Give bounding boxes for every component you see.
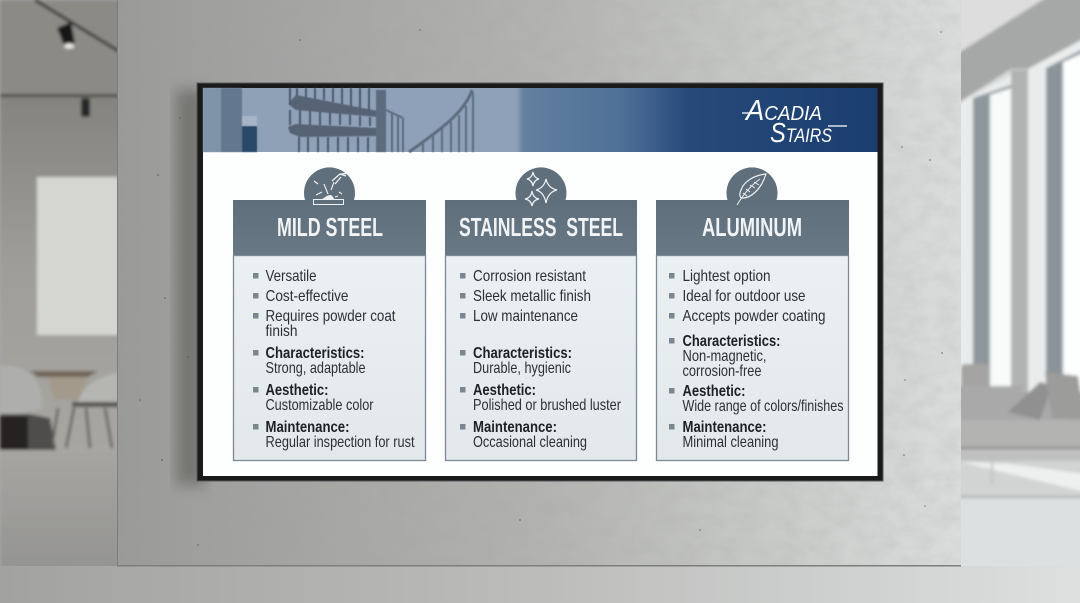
logo: Acadia Stairs: STAIRS — [770, 117, 832, 148]
card header — [233, 200, 426, 255]
bullet list — [460, 268, 622, 451]
logo: Acadia Stairs — [742, 95, 847, 148]
screen frame — [197, 83, 883, 481]
card body — [234, 256, 426, 460]
logo: Acadia Stairs: ACADIA — [744, 95, 822, 127]
bullet list: Corrosion resistant — [473, 268, 586, 285]
left room background — [0, 0, 127, 603]
right room background — [955, 0, 1080, 603]
bullet list — [253, 268, 415, 451]
card header — [656, 200, 849, 255]
bottom floor strip — [0, 566, 1080, 603]
panel: aluminum — [656, 167, 849, 461]
bullet list: Durable, hygienic — [473, 360, 571, 377]
screen shadow on wall — [176, 90, 206, 485]
screen white area — [203, 88, 878, 476]
card title: ALUMINUM — [702, 212, 802, 242]
bullet list: Sleek metallic finish — [473, 288, 591, 305]
bullet list: Maintenance: — [266, 419, 350, 436]
bullet list: Lightest option — [682, 268, 770, 285]
bullet list: Maintenance: — [473, 419, 557, 436]
banner gradient — [203, 88, 878, 152]
icon: sparkles — [516, 167, 566, 206]
bullet list: Characteristics: — [682, 333, 780, 350]
card body — [446, 256, 636, 460]
bullet list: Customizable color — [266, 397, 374, 414]
bullet list: Aesthetic: — [682, 383, 746, 400]
panel: stainless steel — [445, 167, 637, 460]
bullet list: Characteristics: — [266, 345, 364, 362]
bullet list: Accepts powder coating — [682, 308, 826, 325]
bullet list: Polished or brushed luster — [473, 397, 622, 414]
bullet list: Wide range of colors/finishes — [682, 398, 844, 415]
bullet list: Cost-effective — [266, 288, 349, 305]
banner — [203, 88, 878, 152]
bullet list: Low maintenance — [473, 308, 578, 325]
bullet list: Ideal for outdoor use — [682, 288, 806, 305]
bullet list: Aesthetic: — [266, 382, 328, 399]
bullet list: Non-magnetic, — [682, 348, 766, 365]
bullet list: Versatile — [266, 268, 317, 285]
card header — [445, 200, 637, 255]
display screen — [197, 83, 883, 481]
bullet list: corrosion-free — [682, 363, 762, 380]
card title: STAINLESS STEEL — [459, 212, 623, 242]
bullet list: Characteristics: — [473, 345, 572, 362]
panel: mild steel — [233, 167, 426, 460]
bullet list: Strong, adaptable — [266, 360, 366, 377]
concrete wall — [117, 0, 961, 566]
card body — [656, 256, 848, 460]
bullet list: Regular inspection for rust — [266, 434, 415, 451]
bullet list: Occasional cleaning — [473, 434, 587, 451]
bullet list: finish — [266, 323, 298, 340]
icon: feather — [726, 167, 778, 205]
card title: MILD STEEL — [277, 212, 383, 242]
bullet list: Aesthetic: — [473, 382, 536, 399]
bullet list: Minimal cleaning — [682, 434, 778, 451]
bullet list — [669, 268, 844, 451]
staircase photo — [203, 88, 473, 152]
icon: welding torch — [304, 167, 355, 204]
bullet list: Maintenance: — [682, 419, 766, 436]
bullet list: Requires powder coat — [266, 308, 396, 325]
